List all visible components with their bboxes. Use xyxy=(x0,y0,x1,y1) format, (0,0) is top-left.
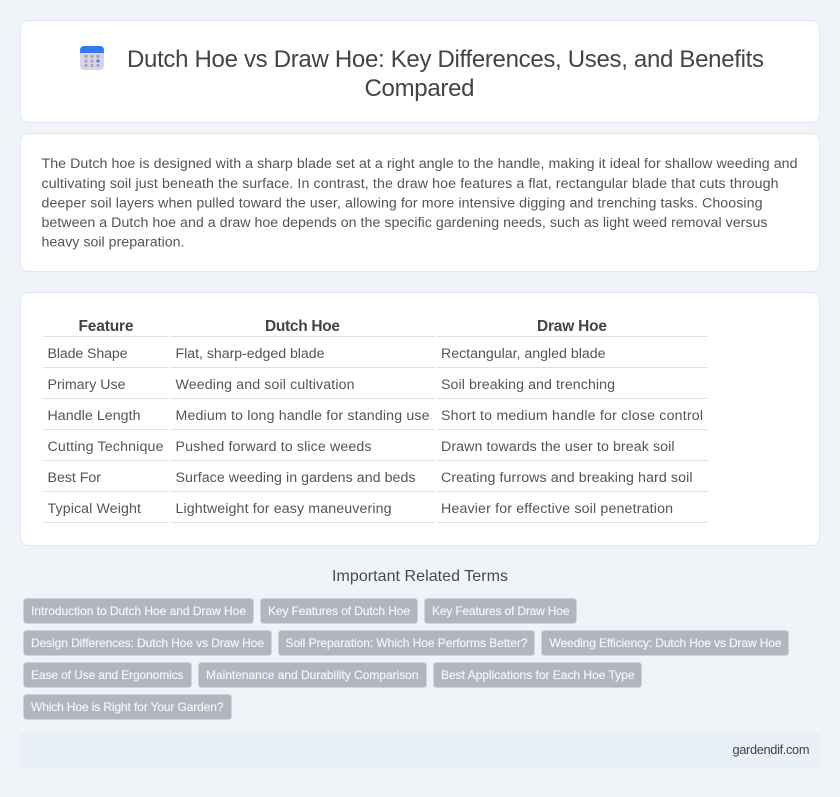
text block: introduction: The Dutch hoe is designed with a sharp blade set at a right angle to the handle, making it ideal for shallow weeding and xyxy=(42,156,798,172)
tag xyxy=(424,598,576,624)
table row: typical weight: Heavier for effective soil penetration xyxy=(441,501,673,517)
table row: handle length: Medium to long handle for standing use xyxy=(176,408,430,424)
table row: handle length: Short to medium handle for close control xyxy=(441,408,703,424)
text block: introduction: deeper soil layers when pulled toward the user, allowing for more intensive digging and trenching tasks. Choosing xyxy=(42,196,762,212)
tag xyxy=(434,662,642,688)
tag xyxy=(24,694,232,720)
icon: calendar xyxy=(80,46,104,70)
tag: Introduction to Dutch Hoe and Draw Hoe xyxy=(31,604,246,618)
table row: primary use: Primary Use xyxy=(48,377,126,393)
table row: blade shape: Flat, sharp-edged blade xyxy=(176,346,325,362)
table row: typical weight xyxy=(48,501,673,517)
table row: handle length xyxy=(48,408,703,424)
text block: introduction: between a Dutch hoe and a draw hoe depends on the specific gardening needs, such as light weed removal versus xyxy=(42,215,768,231)
table rules xyxy=(43,336,708,523)
table row: cutting technique xyxy=(48,439,674,455)
table header xyxy=(78,318,607,335)
tag: Best Applications for Each Hoe Type xyxy=(441,668,635,682)
tag xyxy=(24,662,192,688)
text block: introduction xyxy=(42,156,798,250)
table row: handle length: Handle Length xyxy=(48,408,140,424)
table row: best for: Surface weeding in gardens and beds xyxy=(176,470,416,486)
table row: cutting technique: Cutting Technique xyxy=(48,439,164,455)
table row: blade shape: Rectangular, angled blade xyxy=(441,346,606,362)
table row: best for xyxy=(48,470,692,486)
table row: primary use xyxy=(48,377,615,393)
table row: primary use: Soil breaking and trenching xyxy=(441,377,615,393)
table row: best for: Best For xyxy=(48,470,101,486)
table row: primary use: Weeding and soil cultivation xyxy=(176,377,354,393)
tag: Design Differences: Dutch Hoe vs Draw Hoe xyxy=(31,636,264,650)
tag xyxy=(24,630,272,656)
table header: Dutch Hoe xyxy=(265,318,340,335)
panel: title card xyxy=(20,20,820,122)
tag xyxy=(198,662,426,688)
panel: comparison table card xyxy=(20,292,820,546)
table row: typical weight: Lightweight for easy maneuvering xyxy=(176,501,392,517)
heading: title: Dutch Hoe vs Draw Hoe: Key Differences, Uses, and Benefits xyxy=(127,46,764,73)
tag list: related terms xyxy=(24,598,788,720)
table row: blade shape: Blade Shape xyxy=(48,346,128,362)
tag: Weeding Efficiency: Dutch Hoe vs Draw Hoe xyxy=(550,636,782,650)
tag xyxy=(542,630,788,656)
heading: title: Compared xyxy=(364,75,474,102)
text block: introduction: cultivating soil just beneath the surface. In contrast, the draw hoe features a flat, rectangular blade that cuts through xyxy=(42,176,778,192)
tag xyxy=(260,598,418,624)
panel: introduction text card xyxy=(20,134,820,272)
tag: Key Features of Draw Hoe xyxy=(432,604,570,618)
table row: best for: Creating furrows and breaking hard soil xyxy=(441,470,692,486)
heading: important related terms: Important Related Terms xyxy=(332,568,508,585)
table row: blade shape xyxy=(48,346,606,362)
tag xyxy=(24,598,254,624)
tag: Soil Preparation: Which Hoe Performs Better? xyxy=(286,636,528,650)
tag: Maintenance and Durability Comparison xyxy=(206,668,418,682)
tag: Ease of Use and Ergonomics xyxy=(31,668,184,682)
table row: cutting technique: Pushed forward to slice weeds xyxy=(176,439,372,455)
table row: typical weight: Typical Weight xyxy=(48,501,141,517)
table header: Draw Hoe xyxy=(537,318,607,335)
heading: title xyxy=(127,46,764,102)
tag: Key Features of Dutch Hoe xyxy=(268,604,410,618)
table row: cutting technique: Drawn towards the user to break soil xyxy=(441,439,674,455)
footer text: source: gardendif.com xyxy=(732,742,810,757)
table header: Feature xyxy=(78,318,134,335)
tag: Which Hoe is Right for Your Garden? xyxy=(31,700,224,714)
text block: introduction: heavy soil preparation. xyxy=(42,234,184,250)
tag xyxy=(278,630,534,656)
footer bar xyxy=(20,733,820,767)
